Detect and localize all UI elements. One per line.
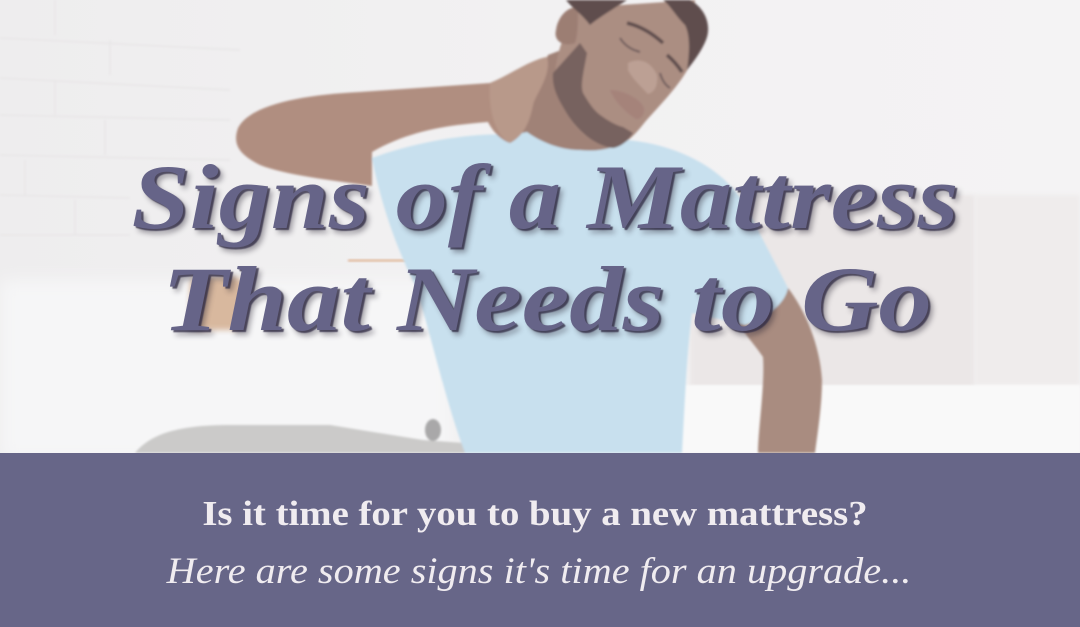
subtitle text: Here are some signs it's time for an upgrade... — [167, 551, 911, 592]
ear — [556, 7, 578, 44]
hand — [490, 57, 548, 143]
question text: Is it time for you to buy a new mattress? — [202, 494, 868, 533]
title — [132, 146, 962, 350]
neck — [515, 43, 625, 168]
right arm — [735, 288, 822, 453]
head — [555, 0, 695, 148]
background photo: man with neck pain on bed — [24, 0, 973, 453]
beard — [553, 43, 633, 148]
title line 2: That Needs to Go — [162, 248, 932, 350]
mouth — [610, 90, 644, 119]
eyes — [620, 38, 670, 88]
legs — [135, 425, 600, 453]
raised arm — [236, 57, 548, 186]
bottom banner — [0, 453, 1080, 627]
shirt — [372, 132, 788, 453]
hair — [566, 0, 708, 70]
title line 1: Signs of a Mattress — [132, 146, 958, 248]
eyebrows — [627, 23, 682, 72]
nose — [628, 61, 657, 94]
